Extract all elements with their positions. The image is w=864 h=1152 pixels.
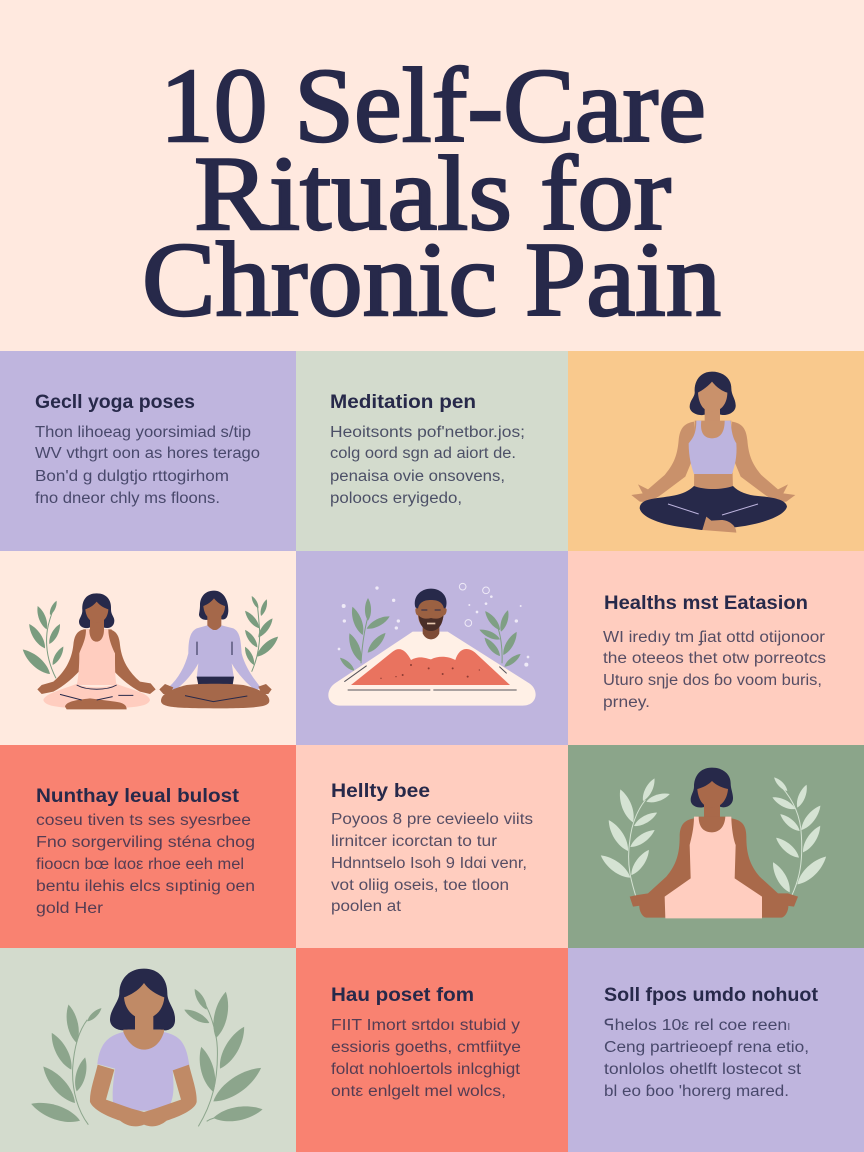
text block: nutrition: coseu tiven ts ses syesrbee bbox=[36, 812, 251, 829]
text block: health: WI iredıy tm ʄiat ottd otijonoor bbox=[603, 629, 825, 646]
text block: meditation: colg oord sgn ad aiort de. bbox=[330, 445, 516, 462]
text block: heat bbox=[331, 1017, 521, 1100]
text block: healthy bbox=[331, 811, 533, 915]
panel: hot/heat poses bbox=[296, 948, 568, 1152]
text block: yoga poses bbox=[35, 424, 260, 507]
heading: nutrition: Nunthay leual bulost bbox=[36, 786, 240, 807]
text block: heat: essioris goeths, cmtfiitye bbox=[331, 1039, 521, 1056]
title bbox=[142, 47, 721, 338]
title: Rituals for bbox=[194, 135, 671, 252]
illustration: woman in lavender t-shirt with leaves bbox=[29, 969, 266, 1127]
text block: healthy: vot oliig oseis, toe tloon bbox=[331, 877, 509, 894]
text block: health bbox=[603, 629, 826, 711]
panel: woman on sage bbox=[0, 948, 296, 1152]
text block: meditation bbox=[330, 424, 525, 507]
heading: meditation: Meditation pen bbox=[330, 392, 476, 413]
text block: soothing: tonlolos ohetlft lostecot st bbox=[604, 1061, 802, 1078]
text block: healthy: poolen at bbox=[331, 898, 402, 915]
illustration: man relaxing in warm sand bbox=[328, 583, 536, 706]
heading: health: Healths mst Eatasion bbox=[604, 593, 808, 614]
text block: yoga poses: WV vthgrt oon as hores terago bbox=[35, 445, 260, 462]
text block: nutrition: gold Her bbox=[36, 900, 103, 917]
heading: heat: Hau poset fom bbox=[331, 985, 474, 1006]
text block: meditation: Heoitsonts pof'netbor.jos; bbox=[330, 424, 525, 441]
text block: healthy: Poyoos 8 pre cevieelo viits bbox=[331, 811, 533, 828]
panel: woman on green bbox=[568, 745, 864, 948]
illustration: two meditating women with leaves bbox=[19, 591, 281, 709]
panel: gentle yoga poses bbox=[0, 351, 296, 551]
text block: nutrition bbox=[36, 812, 255, 917]
illustration: meditating woman in pink dress with pale leaves bbox=[598, 768, 830, 918]
text block: health: Uturo sηje dos ɓo voom buris, bbox=[603, 672, 822, 689]
heading: yoga poses: Gecll yoga poses bbox=[35, 392, 195, 413]
text block: health: the oteeos thet otw porreotcs bbox=[603, 650, 826, 667]
panel: man in bath bbox=[296, 551, 568, 745]
text block: soothing: Ceng partrieoepf rena etio, bbox=[604, 1039, 809, 1056]
panel: healthy bbox=[296, 745, 568, 948]
text block: nutrition: fioocn bœ lαoε rhoe eeh mel bbox=[36, 856, 244, 873]
text block: healthy: lirnitcer icorctan to tur bbox=[331, 833, 497, 850]
text block: soothing bbox=[604, 1017, 809, 1100]
title: Chronic Pain bbox=[142, 221, 721, 338]
text block: yoga poses: Thon lihoeag yoorsimiad s/tip bbox=[35, 424, 251, 441]
panel: soothing bbox=[568, 948, 864, 1152]
title: 10 Self-Care bbox=[160, 47, 706, 164]
text block: nutrition: bentu ilehis elcs sıptinig oen bbox=[36, 878, 255, 895]
text block: heat: ontε enlgelt mel wolcs, bbox=[331, 1083, 506, 1100]
text block: yoga poses: Bon'd g dulgtjo rttogirhom bbox=[35, 468, 229, 485]
text block: health: prney. bbox=[603, 694, 650, 711]
text block: soothing: bl eo ɓoo 'horerg mared. bbox=[604, 1083, 789, 1100]
text block: healthy: Hdnntselo Isoh 9 Idαi venr, bbox=[331, 855, 527, 872]
heading: healthy: Hellty bee bbox=[331, 781, 430, 802]
panel: health and eating bbox=[568, 551, 864, 745]
panel: seated woman on yellow bbox=[568, 351, 864, 551]
panel: nutrition bbox=[0, 745, 296, 948]
text block: meditation: penaisa ovie onsovens, bbox=[330, 468, 505, 485]
illustration: meditating woman in lavender top bbox=[631, 372, 795, 533]
text block: meditation: poloocs eryigedo, bbox=[330, 490, 462, 507]
text block: heat: FIIT Imort srtdoı stubid y bbox=[331, 1017, 520, 1034]
heading: soothing: Soll fpos umdo nohuot bbox=[604, 985, 819, 1006]
panel: meditation bbox=[296, 351, 568, 551]
text block: yoga poses: fno dneor chly ms floons. bbox=[35, 490, 220, 507]
panel: two women meditating bbox=[0, 551, 296, 745]
text block: nutrition: Fno sorgerviling sténa chog bbox=[36, 834, 255, 851]
text block: soothing: ᕋhelos 10ε rel coe reen၊ bbox=[604, 1017, 790, 1034]
text block: heat: folαt nohloertols inlcghigt bbox=[331, 1061, 521, 1078]
